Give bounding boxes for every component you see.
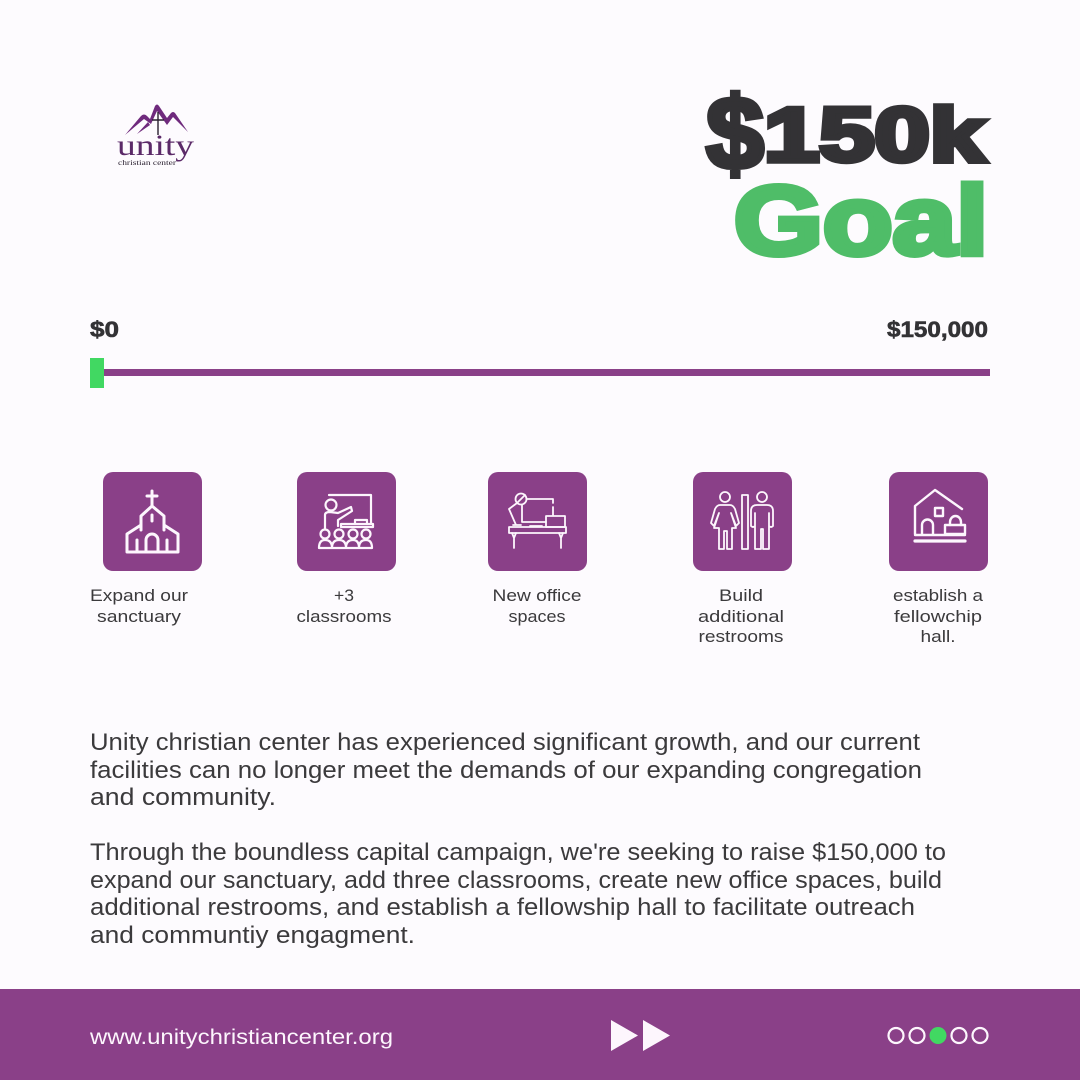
item: establish a fellowship hall <box>889 472 988 646</box>
progress marker <box>90 358 104 388</box>
caption line 2: classrooms <box>296 607 392 626</box>
text block: paragraph 2: and communtiy engagment. <box>90 922 415 949</box>
logo wordmark: unity <box>117 129 194 162</box>
logo tagline: christian center <box>118 158 177 167</box>
item: build additional restrooms <box>693 472 792 646</box>
item: expand our sanctuary <box>90 472 202 626</box>
icon: fellowship hall house <box>889 472 988 571</box>
caption line 3: restrooms <box>698 627 784 646</box>
caption line 3: hall. <box>920 627 956 646</box>
caption: +3 <box>334 586 354 605</box>
text block: paragraph 2: Through the boundless capital campaign, we're seeking to raise $150,000 to <box>90 839 946 866</box>
text block: paragraph 1: facilities can no longer meet the demands of our expanding congregation <box>90 757 922 784</box>
icon: office desk <box>488 472 587 571</box>
website url: www.unitychristiancenter.org <box>89 1026 393 1049</box>
label: $0: $0 <box>90 317 119 342</box>
item: +3 classrooms <box>296 472 396 626</box>
title: $150k <box>706 76 986 191</box>
icon: mountains with cross <box>125 104 188 135</box>
title: $150k: $ <box>706 76 764 191</box>
text block: paragraph 2 <box>90 839 946 949</box>
icon: restroom figures <box>693 472 792 571</box>
title: Goal: Goal <box>734 166 988 275</box>
text block: paragraph 1 <box>90 729 922 811</box>
label: $150,000: $150,000 <box>887 317 988 342</box>
caption line 2: fellowchip <box>894 607 982 626</box>
icon: classroom teacher <box>297 472 396 571</box>
progress track <box>90 369 990 376</box>
icon: church <box>103 472 202 571</box>
footer bar <box>0 989 1080 1080</box>
caption line 2: sanctuary <box>97 607 182 626</box>
caption line 2: additional <box>698 607 784 626</box>
caption: establish a <box>893 586 984 605</box>
caption: New office <box>492 586 582 605</box>
item: new office spaces <box>488 472 587 626</box>
pagination dots <box>888 1027 988 1044</box>
title: $150k: 150k <box>764 93 986 178</box>
logo: unity christian center <box>117 104 194 167</box>
text block: paragraph 2: additional restrooms, and establish a fellowship hall to facilitate outreach <box>90 894 915 921</box>
text block: paragraph 1: and community. <box>90 784 276 811</box>
text block: paragraph 2: expand our sanctuary, add three classrooms, create new office spaces, build <box>90 867 942 894</box>
icon: forward arrows <box>611 1020 670 1051</box>
text block: paragraph 1: Unity christian center has experienced significant growth, and our current <box>90 729 920 756</box>
progress bar <box>90 317 990 388</box>
caption: Expand our <box>90 586 188 605</box>
caption: Build <box>719 586 763 605</box>
caption line 2: spaces <box>508 607 566 626</box>
